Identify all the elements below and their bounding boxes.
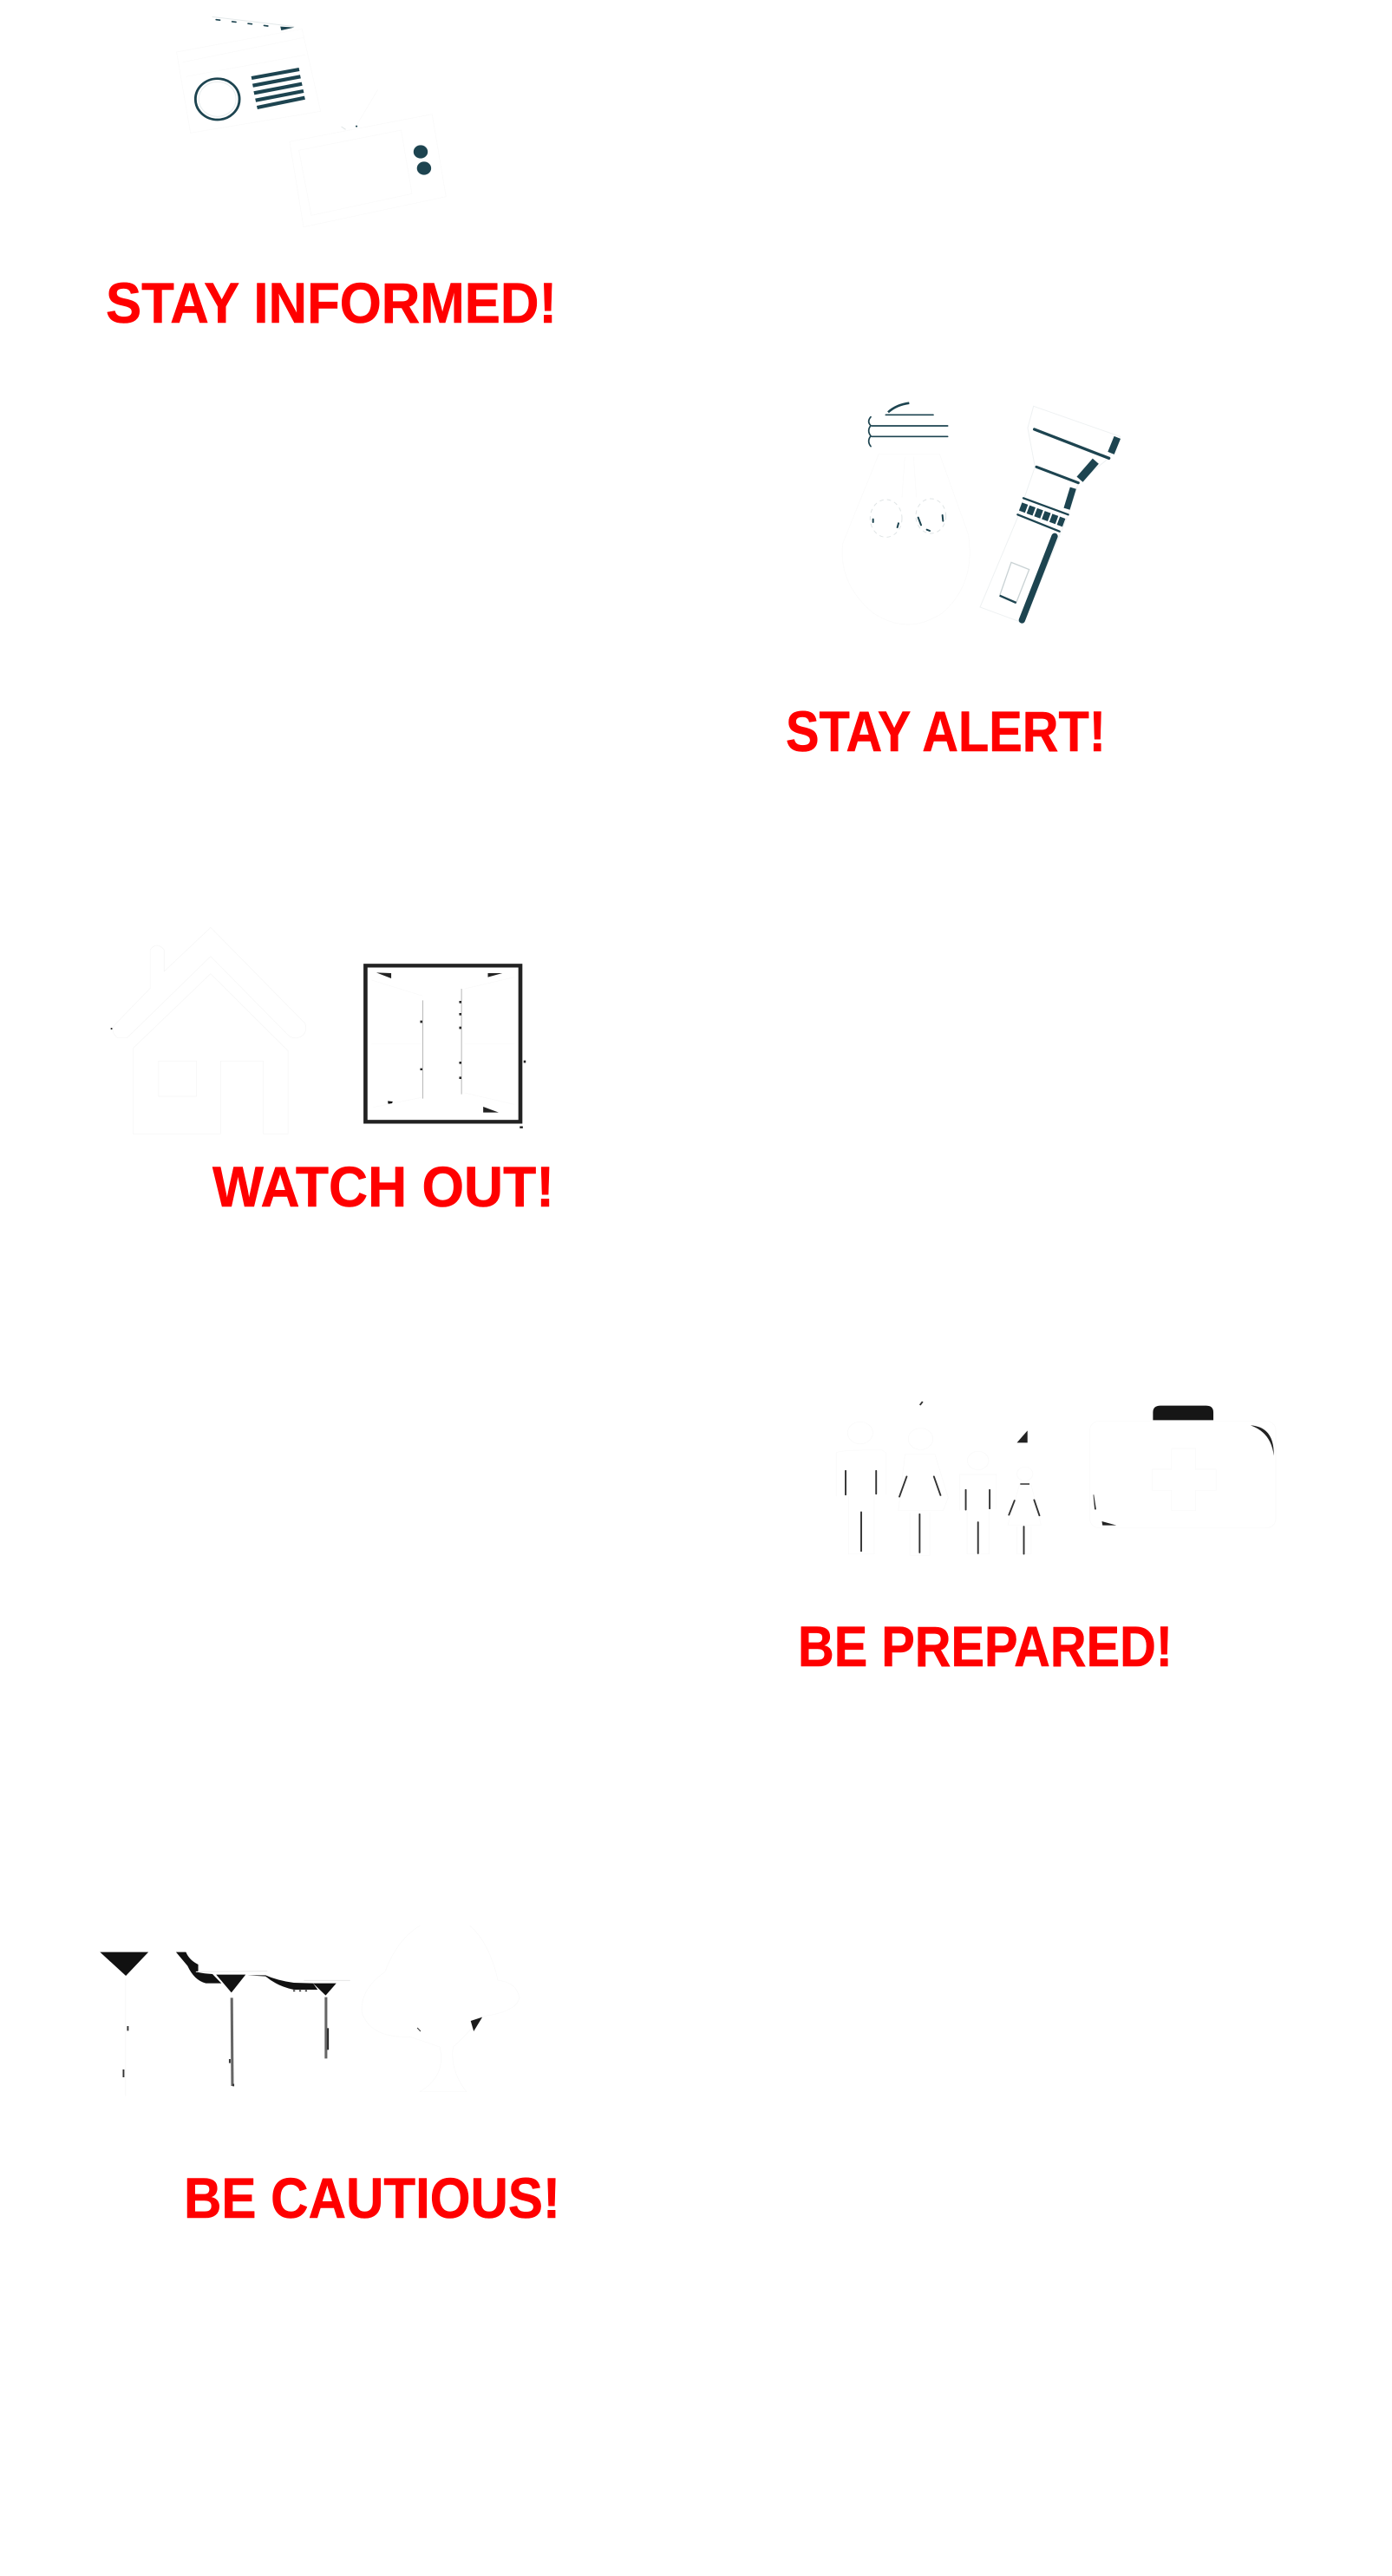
- icon: light bulb: [842, 403, 970, 624]
- icon: window: [365, 965, 525, 1128]
- icon: family with numbers: [836, 1402, 1041, 1555]
- panel: be cautious: [100, 1925, 560, 2230]
- icon: house: [110, 927, 306, 1134]
- icon: first aid kit: [1090, 1406, 1276, 1528]
- icon: power lines: [100, 1952, 350, 2096]
- heading: be prepared: BE PREPARED!: [798, 1614, 1173, 1678]
- panel: watch out: [110, 927, 554, 1219]
- panel: be prepared: [798, 1402, 1276, 1678]
- icon: flashlight: [980, 406, 1121, 623]
- heading: be cautious: BE CAUTIOUS!: [184, 2166, 560, 2230]
- icon: radio: [177, 16, 321, 133]
- heading: stay informed: STAY INFORMED!: [106, 271, 557, 335]
- icon: television: [290, 89, 446, 227]
- heading: stay alert: STAY ALERT!: [786, 699, 1106, 763]
- panel: stay alert: [786, 403, 1121, 763]
- panel: stay informed: [106, 16, 557, 335]
- heading: watch out: WATCH OUT!: [212, 1154, 554, 1219]
- icon: tree: [362, 1925, 520, 2092]
